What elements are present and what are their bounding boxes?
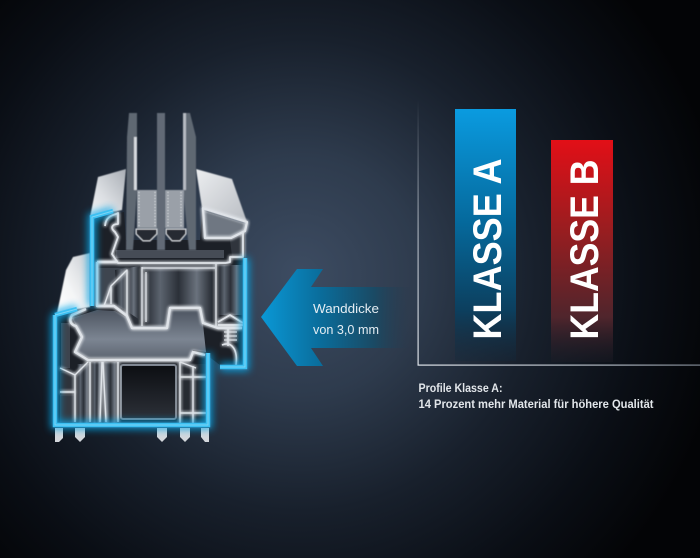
bar: Klasse B [551, 140, 613, 362]
bar: Klasse A [455, 109, 516, 361]
icon: steel reinforcement [121, 365, 176, 419]
axis [418, 100, 700, 366]
icon: frame body [56, 308, 220, 424]
icon: sash dark body [95, 210, 246, 366]
caption [418, 383, 654, 411]
arrow label: Wanddicke [313, 302, 379, 316]
bar chart: material comparison [418, 100, 700, 366]
icon: white inner walls [60, 208, 247, 423]
arrow label: von 3,0 mm [313, 323, 379, 337]
icon: white profile bevels [57, 169, 247, 313]
icon: glass panes [126, 113, 196, 250]
window profile cross-section [55, 113, 247, 442]
bar: Klasse B: KLASSE B [563, 160, 607, 340]
caption: Profile Klasse A: [418, 383, 502, 395]
arrow: wall thickness callout [261, 269, 412, 366]
caption: 14 Prozent mehr Material für höhere Qualität [418, 399, 654, 411]
icon: feet [55, 428, 209, 442]
icon: spacer bars [136, 190, 186, 241]
bar: Klasse A: KLASSE A [466, 158, 510, 340]
arrow label [313, 302, 379, 337]
icon: blue wall thickness outline [55, 211, 245, 425]
